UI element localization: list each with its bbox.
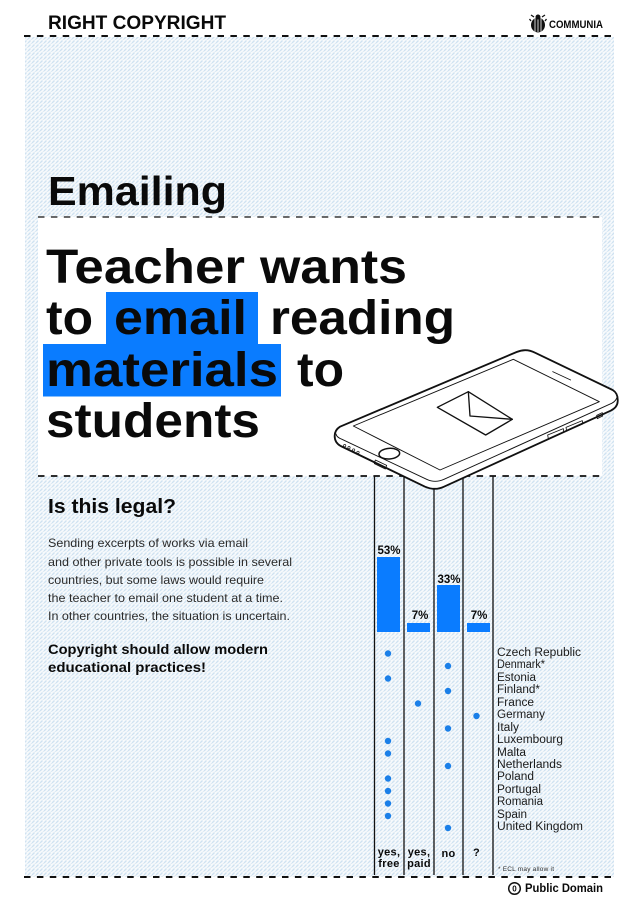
country dots	[385, 650, 480, 831]
body paragraph: In other countries, the situation is uncertain.	[48, 609, 290, 623]
column labels: ?	[473, 847, 480, 859]
column labels: free	[378, 858, 400, 870]
logo: Communia	[530, 14, 603, 32]
public domain badge: Public Domain	[525, 883, 603, 895]
country list: Malta	[497, 747, 527, 759]
country list: Italy	[497, 722, 519, 734]
column labels: yes,	[408, 846, 430, 858]
white headline panel	[38, 217, 602, 476]
illustration: smartphone with envelope	[335, 350, 618, 489]
column labels: paid	[407, 858, 431, 870]
main headline: Teacher	[46, 240, 245, 294]
country list: Spain	[497, 809, 527, 821]
main headline	[43, 240, 455, 448]
section heading: Emailing	[48, 168, 227, 214]
main headline: to	[46, 291, 93, 345]
country list: United Kingdom	[497, 821, 583, 833]
call to action: educational practices!	[48, 659, 206, 675]
column labels	[378, 846, 480, 870]
column divider lines	[374, 476, 493, 875]
home button	[379, 448, 400, 460]
logo: Communia: COMMUNIA	[549, 19, 603, 31]
country list: Romania	[497, 796, 544, 808]
country list: Luxembourg	[497, 734, 563, 746]
country list: Finland*	[497, 684, 541, 696]
bar chart: 33%	[437, 574, 461, 586]
body paragraph: the teacher to email one student at a time.	[48, 591, 283, 605]
main headline: wants	[259, 240, 407, 294]
column labels: yes,	[378, 846, 400, 858]
public domain badge: 0	[512, 884, 517, 894]
country list	[497, 647, 583, 833]
bar chart: 7%	[471, 610, 487, 622]
body paragraph: and other private tools is possible in several	[48, 555, 292, 569]
bar chart	[377, 545, 490, 632]
header label: RIGHT COPYRIGHT	[48, 13, 226, 34]
column labels: no	[441, 848, 456, 860]
country list: Czech Republic	[497, 647, 581, 659]
body paragraph: Sending excerpts of works via email	[48, 536, 248, 550]
footnote: * ECL may allow it	[498, 866, 554, 873]
body paragraph	[48, 536, 292, 623]
main headline: email	[114, 291, 247, 345]
body paragraph: countries, but some laws would require	[48, 573, 264, 587]
main headline: reading	[270, 291, 455, 345]
country list: Netherlands	[497, 759, 562, 771]
call to action: Copyright should allow modern	[48, 641, 268, 657]
screen	[353, 359, 599, 470]
text heading: Is this legal?: Is this legal?	[48, 496, 176, 518]
country list: Estonia	[497, 672, 537, 684]
highlight: email	[106, 292, 258, 344]
bar chart: 53%	[377, 545, 401, 557]
highlight: materials	[43, 344, 281, 396]
country list: Denmark*	[497, 659, 545, 671]
country list: Portugal	[497, 784, 541, 796]
main headline: to	[297, 343, 344, 397]
main headline: materials	[46, 343, 278, 397]
main headline: students	[46, 394, 260, 448]
country list: France	[497, 697, 534, 709]
bar chart: 7%	[412, 610, 428, 622]
country list: Germany	[497, 709, 545, 721]
call to action	[48, 641, 268, 675]
icon: envelope	[437, 392, 512, 435]
country list: Poland	[497, 771, 534, 783]
